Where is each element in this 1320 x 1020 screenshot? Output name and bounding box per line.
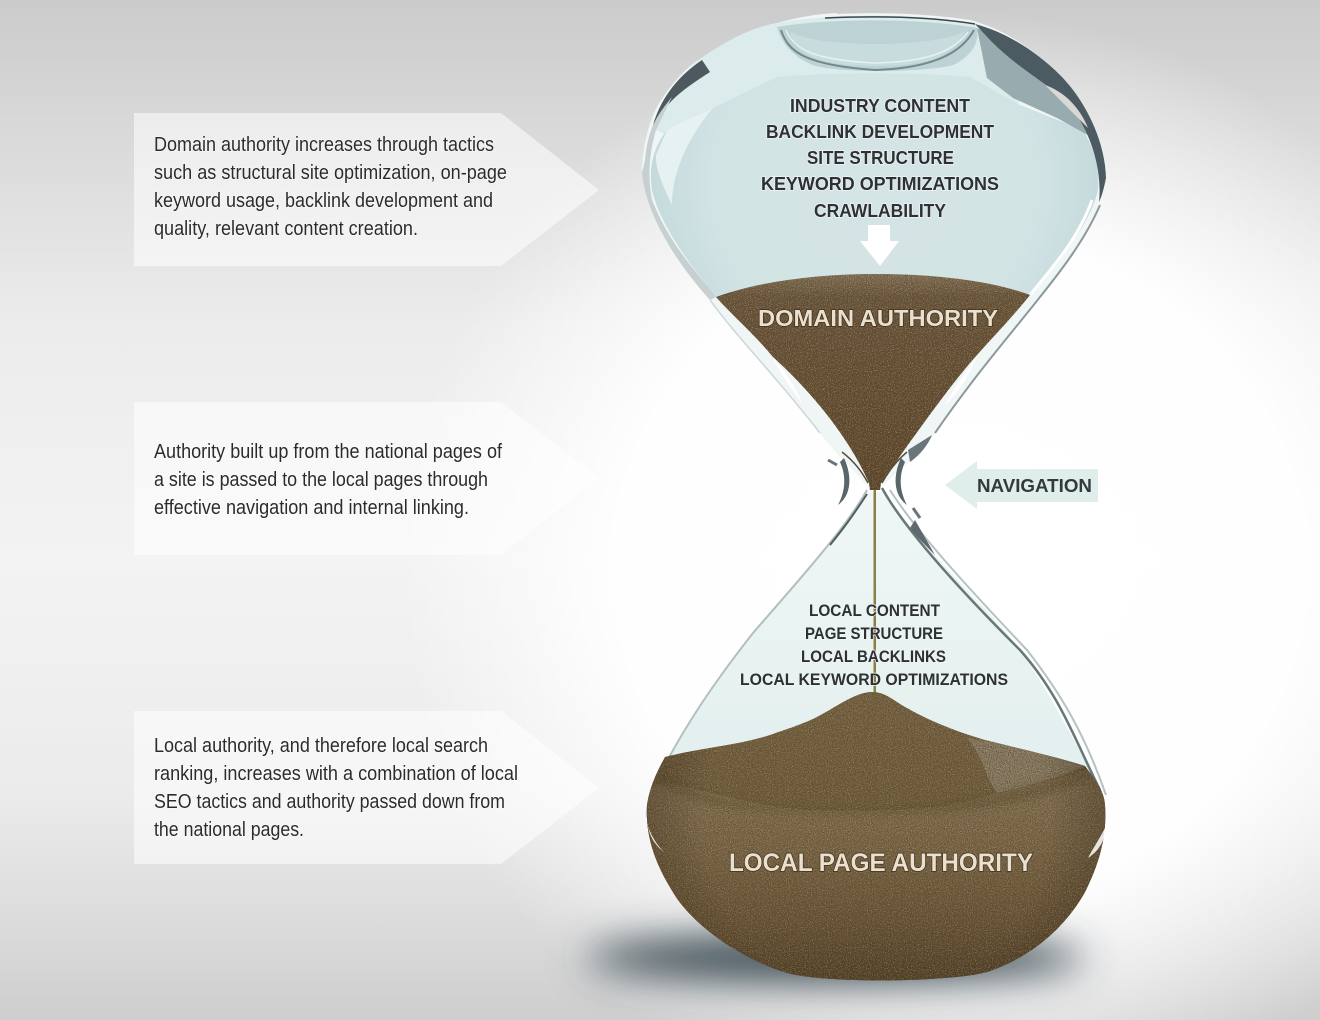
upper hourglass ingredients list xyxy=(761,96,999,221)
panel: local authority explanation: SEO tactics and authority passed down from xyxy=(154,791,505,813)
panel: domain authority explanation: such as structural site optimization, on-page xyxy=(154,162,507,184)
upper hourglass ingredients list: SITE STRUCTURE xyxy=(807,148,954,168)
panel: local authority explanation: the national pages. xyxy=(154,819,304,841)
inner rim tint xyxy=(656,108,713,205)
label: local page authority: LOCAL PAGE AUTHORITY xyxy=(729,849,1033,877)
lower hourglass ingredients list xyxy=(740,602,1008,689)
hourglass xyxy=(640,13,1110,985)
panel: navigation explanation: effective navigation and internal linking. xyxy=(154,497,469,519)
glass slits beside upper sand xyxy=(773,355,977,405)
lower sand xyxy=(640,690,1110,985)
glass slits on lower bulb xyxy=(648,826,1106,858)
upper hourglass ingredients list: BACKLINK DEVELOPMENT xyxy=(766,122,994,142)
label: domain authority: DOMAIN AUTHORITY xyxy=(758,305,998,331)
lower hourglass ingredients list: LOCAL BACKLINKS xyxy=(801,648,946,666)
panel: domain authority explanation xyxy=(134,113,599,266)
lit facet on right of the mound xyxy=(967,738,1085,793)
top cup xyxy=(777,20,977,71)
panel: local authority explanation xyxy=(134,711,599,864)
lower hourglass ingredients list: LOCAL CONTENT xyxy=(809,602,940,620)
lower hourglass ingredients list: PAGE STRUCTURE xyxy=(805,625,943,643)
upper sand xyxy=(716,274,1030,490)
upper glass bulb xyxy=(642,13,1106,485)
upper hourglass ingredients list: CRAWLABILITY xyxy=(814,201,946,221)
panel: local authority explanation: Local authority, and therefore local search xyxy=(154,735,488,757)
panel: local authority explanation: ranking, increases with a combination of local xyxy=(154,763,518,785)
upper hourglass ingredients list: INDUSTRY CONTENT xyxy=(790,96,970,116)
falling sand stream xyxy=(874,486,876,694)
pale shoulder of the bulb xyxy=(655,16,1020,150)
neck fittings xyxy=(828,435,935,555)
water inside upper bulb xyxy=(651,73,1098,297)
right glass band xyxy=(977,28,1104,170)
panel: navigation explanation xyxy=(134,402,599,555)
panel: domain authority explanation: Domain authority increases through tactics xyxy=(154,134,494,156)
panel: domain authority explanation: keyword usage, backlink development and xyxy=(154,190,493,212)
arrow: down into domain authority xyxy=(860,225,899,266)
lower glass bulb xyxy=(645,488,1106,817)
hourglass shadow xyxy=(585,934,1085,982)
dark right edge xyxy=(975,24,1106,202)
arrow label: navigation: NAVIGATION xyxy=(977,476,1092,496)
outer edge strokes xyxy=(935,205,1100,433)
panel: domain authority explanation: quality, relevant content creation. xyxy=(154,218,418,240)
upper hourglass ingredients list: KEYWORD OPTIMIZATIONS xyxy=(761,174,999,194)
panel: navigation explanation: Authority built up from the national pages of xyxy=(154,441,502,463)
lower hourglass ingredients list: LOCAL KEYWORD OPTIMIZATIONS xyxy=(740,671,1008,689)
arrow label: navigation xyxy=(945,461,1098,509)
dark left edge xyxy=(653,60,710,125)
panel: navigation explanation: a site is passed to the local pages through xyxy=(154,469,488,491)
